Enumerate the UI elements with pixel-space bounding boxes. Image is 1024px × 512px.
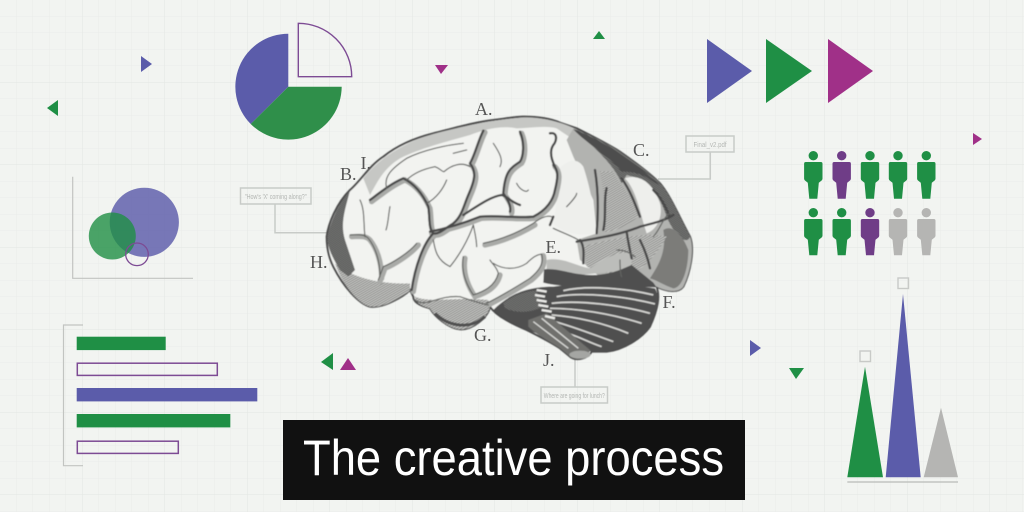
icon: small triangle magenta right (973, 133, 982, 145)
cerebellum left hatching (503, 291, 543, 312)
callout: how's X coming along (240, 188, 328, 233)
label E: E. (546, 237, 561, 257)
callout text: "How's 'X' coming along?" (245, 192, 307, 201)
callout: final pdf (658, 136, 734, 179)
person 6 (804, 208, 822, 255)
person 8 (861, 208, 879, 255)
icon: small triangle magenta up (340, 358, 356, 370)
triangle: blue (886, 294, 921, 477)
venn bubble chart (73, 177, 193, 278)
shaded lower occipital folds (583, 235, 667, 278)
title background (283, 420, 745, 500)
marker square: green (860, 351, 870, 362)
callout text: Where are going for lunch? (544, 391, 605, 400)
arrow: blue (707, 39, 752, 103)
bar: green 2 (77, 414, 230, 427)
shaded band above dark fold (547, 252, 633, 275)
callout box (686, 136, 734, 152)
person 9 (889, 208, 907, 255)
callout leader line (658, 152, 710, 179)
person 4 (889, 151, 907, 199)
label A: A. (475, 99, 492, 119)
callout box (541, 387, 608, 403)
brain letter labels (310, 99, 676, 370)
person 3 (861, 151, 879, 199)
icon: small triangle green down (789, 368, 804, 379)
pie slice: green (251, 87, 342, 140)
marker square: blue (898, 278, 908, 288)
triangle bar chart (847, 278, 958, 482)
person 1 (804, 151, 822, 199)
person 7 (832, 208, 851, 255)
cerebellum stripes (550, 288, 655, 347)
label J: J. (543, 350, 555, 370)
bar: blue (77, 388, 257, 401)
shaded frontal edge (327, 191, 355, 277)
brain stem cap (569, 351, 591, 359)
bubble: blue (110, 188, 179, 257)
icon: small triangle green left (47, 100, 58, 116)
pie chart (235, 23, 352, 140)
shaded parietal folds (600, 172, 640, 232)
bar: green 1 (77, 337, 166, 350)
triangle: green (847, 367, 883, 477)
pie slice: outlined quarter (298, 23, 352, 77)
label G: G. (474, 325, 492, 345)
shaded rear lobe base (567, 128, 692, 291)
brain silhouette (327, 117, 692, 359)
pictogram people (804, 151, 936, 255)
sulci soft shading (352, 132, 559, 305)
play arrows (707, 39, 873, 103)
callout text: Final_v2.pdf (694, 140, 727, 149)
arrow: green (766, 39, 812, 103)
brain engraving (327, 117, 692, 359)
icon: small triangle blue (141, 56, 152, 72)
major sulci (370, 131, 673, 290)
person 10 (917, 208, 936, 255)
chart axes (73, 177, 193, 278)
rear light gyri (553, 161, 661, 235)
callout leader line (574, 358, 576, 387)
occipital pole speckle (650, 228, 688, 288)
dark fold under brain (543, 265, 657, 287)
icon: small triangle magenta down (435, 65, 448, 74)
shaded rear lobe hatching (573, 128, 690, 240)
dark upper rear band (573, 129, 662, 187)
shaded temporal underside (415, 297, 490, 329)
triangle: grey (924, 408, 958, 477)
bubble: green (89, 212, 136, 260)
label C: C. (633, 140, 650, 160)
secondary sulci (350, 143, 670, 305)
dark temporal tip line (435, 313, 485, 325)
pons ridges (535, 290, 555, 318)
icon: small triangle green left lower (321, 353, 333, 370)
bar: outline 2 (77, 441, 178, 453)
person 5 (917, 151, 936, 199)
arrow: magenta (828, 39, 873, 103)
bar: outline 1 (77, 363, 217, 375)
brain stem highlights (533, 318, 578, 348)
label F: F. (662, 292, 676, 312)
chart baseline (847, 481, 958, 483)
bar chart axis (64, 325, 83, 466)
brain stem (528, 313, 590, 359)
pie slice: blue (235, 34, 288, 124)
grey top gyrus strip (363, 117, 577, 195)
horizontal bar chart (64, 325, 257, 466)
cerebellum dark body (493, 284, 658, 352)
callout leader line (275, 204, 328, 233)
label I: I. (360, 153, 371, 173)
title: The creative process (303, 430, 724, 486)
bubble: purple ring (126, 243, 148, 266)
callout: lunch (541, 358, 608, 403)
shaded frontal underside (335, 263, 410, 307)
icon: small triangle blue right (750, 340, 761, 356)
icon: small triangle green up (593, 31, 605, 39)
title banner (283, 420, 745, 500)
label B: B. (340, 164, 357, 184)
label H: H. (310, 252, 328, 272)
callout box (240, 188, 311, 204)
person 2 (832, 151, 851, 199)
